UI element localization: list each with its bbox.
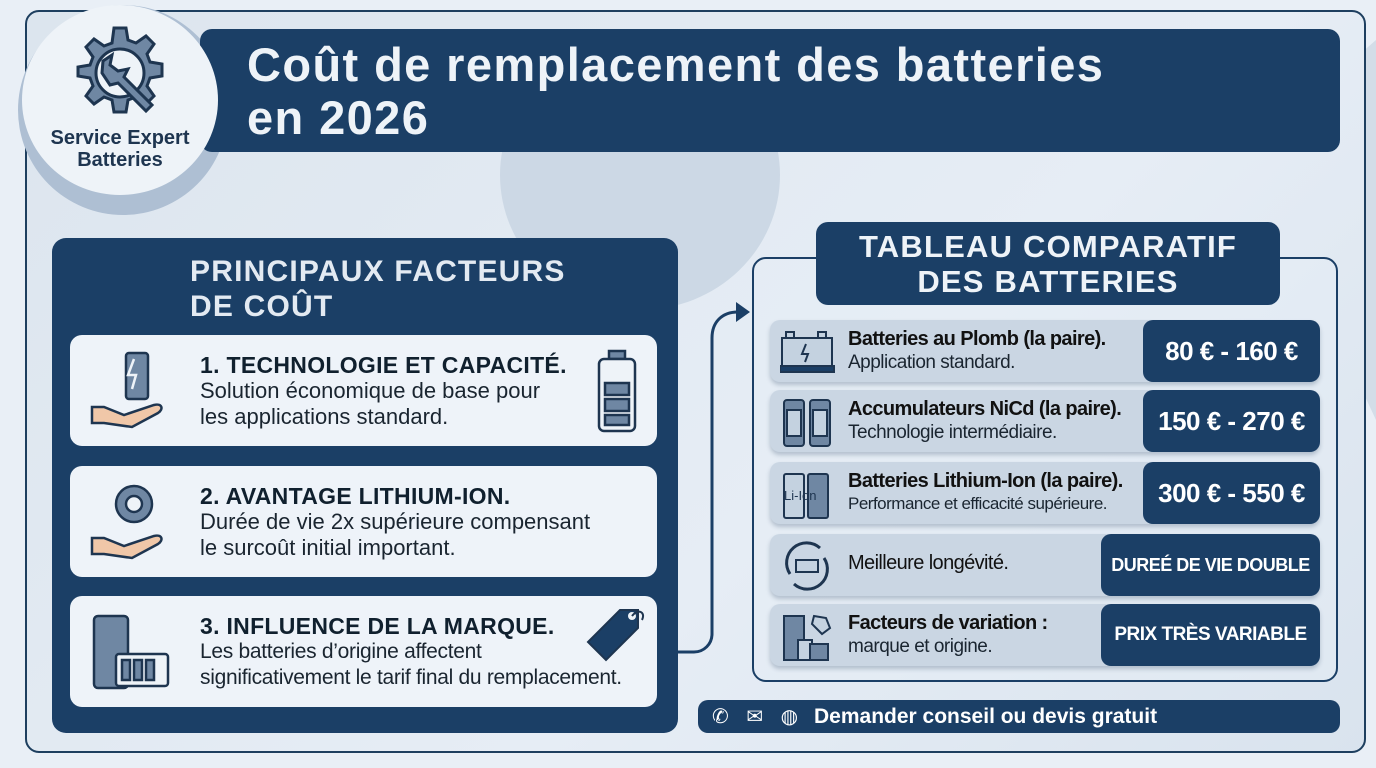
heading	[190, 255, 566, 323]
background circle	[500, 40, 780, 310]
heading: DE COÛT	[190, 290, 333, 323]
logo text: Batteries	[77, 149, 163, 171]
row: nicd: Accumulateurs NiCd (la paire).	[848, 398, 1121, 420]
row: nicd: 150 € - 270 €	[1158, 406, 1305, 436]
logo text	[50, 127, 190, 171]
row: variation	[770, 604, 1320, 666]
logo circle	[22, 5, 218, 195]
icon: battery level	[598, 350, 636, 432]
card 2: Durée de vie 2x supérieure compensant	[200, 509, 590, 534]
card 3: significativement le tarif final du remplacement.	[200, 666, 622, 689]
row: nicd	[770, 390, 1320, 452]
row: li-ion	[770, 462, 1320, 524]
title: en 2026	[247, 91, 429, 144]
title: Coût de remplacement des batteries	[247, 38, 1104, 91]
card 3: Les batteries d’origine affectent	[200, 640, 482, 663]
icon: price tag	[586, 609, 644, 662]
panel: comparison table	[752, 257, 1338, 682]
row: plomb	[770, 320, 1320, 382]
row: plomb: Application standard.	[848, 352, 1015, 373]
row: variation: Facteurs de variation :	[848, 612, 1048, 634]
table heading	[816, 222, 1280, 305]
card 2	[70, 466, 657, 577]
bottom call-to-action bar	[698, 700, 1340, 733]
panel: cost factors	[52, 238, 678, 733]
row: li-ion: Li-Ion	[784, 488, 817, 503]
card 1	[70, 335, 657, 446]
card 1: Solution économique de base pour	[200, 378, 540, 403]
icon: gear with wrench	[76, 26, 164, 114]
logo text: Service Expert	[50, 127, 189, 149]
icon: hand gear	[90, 484, 163, 560]
row: li-ion: 300 € - 550 €	[1158, 478, 1305, 508]
card 3	[70, 596, 657, 707]
title	[247, 38, 1104, 144]
logo ring	[18, 5, 228, 215]
row: longevity: DUREÉ DE VIE DOUBLE	[1111, 554, 1310, 574]
card 2: 2. AVANTAGE LITHIUM-ION.	[200, 483, 510, 509]
arrow	[678, 302, 750, 654]
heading: PRINCIPAUX FACTEURS	[190, 255, 566, 288]
row: plomb: Batteries au Plomb (la paire).	[848, 328, 1106, 350]
row: longevity	[770, 534, 1320, 596]
card 1: les applications standard.	[200, 404, 448, 429]
card 3: 3. INFLUENCE DE LA MARQUE.	[200, 613, 555, 639]
row: longevity: Meilleure longévité.	[848, 552, 1008, 574]
row: li-ion: Batteries Lithium-Ion (la paire).	[848, 470, 1123, 492]
row: variation: PRIX TRÈS VARIABLE	[1114, 624, 1307, 645]
icon: batteries	[92, 614, 170, 690]
row: nicd: Technologie intermédiaire.	[848, 422, 1057, 443]
title bar	[200, 29, 1340, 152]
card 2: le surcoût initial important.	[200, 535, 456, 560]
table heading: DES BATTERIES	[917, 264, 1179, 299]
row: li-ion: Performance et efficacité supérieure.	[848, 494, 1107, 513]
row: plomb: 80 € - 160 €	[1165, 336, 1298, 366]
row: variation: marque et origine.	[848, 636, 992, 657]
card 1: 1. TECHNOLOGIE ET CAPACITÉ.	[200, 352, 567, 378]
bottom call-to-action bar: Demander conseil ou devis gratuit	[814, 705, 1157, 728]
table heading: TABLEAU COMPARATIF	[859, 229, 1237, 264]
icon: hand battery	[90, 352, 163, 428]
contact icons: ✆ ✉ ◍	[712, 706, 804, 728]
